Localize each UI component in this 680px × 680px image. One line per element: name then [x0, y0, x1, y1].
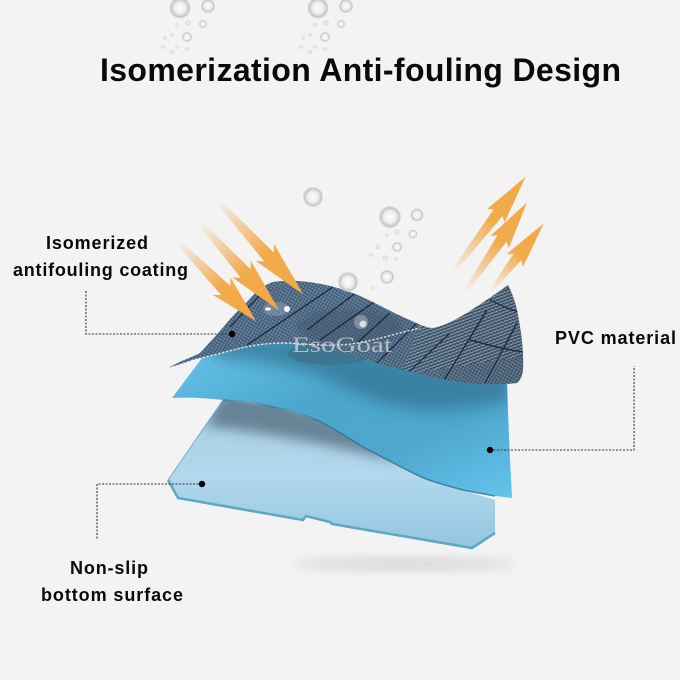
- label: non-slip bottom surface: [41, 558, 183, 605]
- label: PVC material: PVC material: [555, 328, 676, 348]
- label: isomerized antifouling coating: [13, 233, 188, 280]
- arrows: incoming left: [169, 192, 313, 330]
- leader line: PVC: [487, 366, 634, 453]
- grid stitching lines: [230, 287, 525, 383]
- water drops on coating: [263, 302, 368, 329]
- label: isomerized antifouling coating: antifouling coating: [13, 260, 188, 280]
- layer: isomerized antifouling coating: [168, 280, 524, 384]
- arrows: outgoing right: [443, 170, 552, 298]
- water droplets: top left cluster: [161, 0, 215, 54]
- leader line: coating: [86, 291, 235, 337]
- floor shadow: [293, 559, 517, 569]
- water droplets: top centre cluster: [299, 0, 353, 54]
- title: Isomerization Anti-fouling Design: [100, 52, 621, 88]
- leader line: non-slip: [97, 481, 205, 540]
- water droplets: centre cluster: [303, 187, 424, 292]
- label: non-slip bottom surface: bottom surface: [41, 585, 183, 605]
- dark stain under coating: [288, 343, 372, 365]
- layer: PVC material: [165, 335, 515, 500]
- watermark: EsoGoat: [292, 332, 392, 357]
- layer: non-slip bottom surface: [168, 392, 495, 548]
- label: isomerized antifouling coating: Isomerized: [46, 233, 148, 253]
- label: non-slip bottom surface: Non-slip: [70, 558, 148, 578]
